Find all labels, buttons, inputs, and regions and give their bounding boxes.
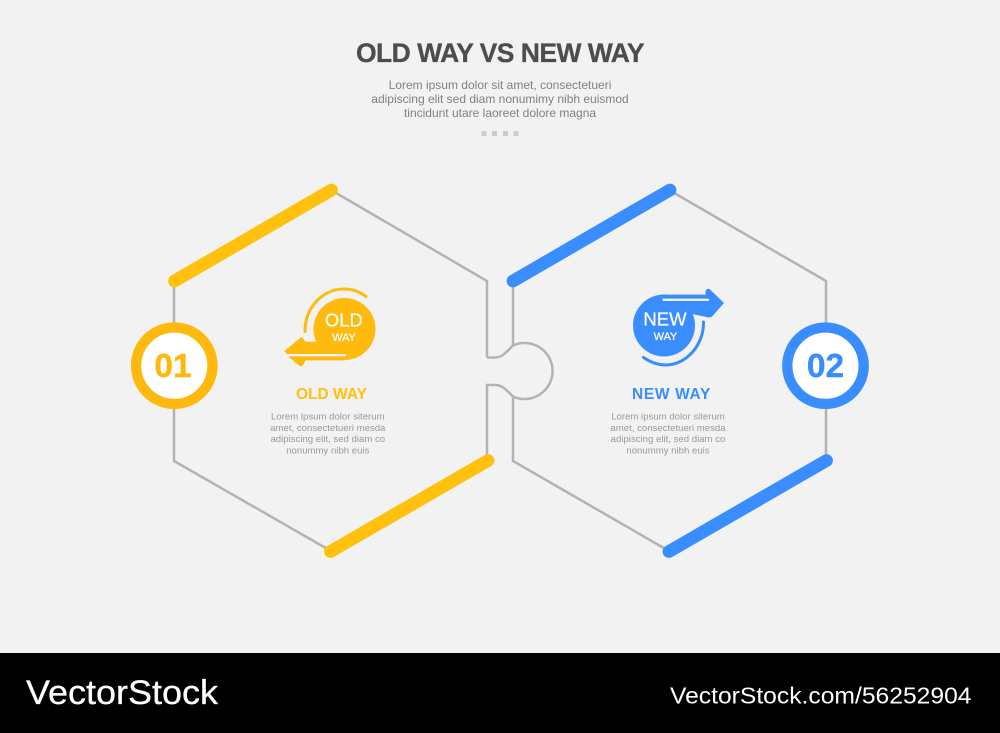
number badge 02: 02 xyxy=(807,348,844,385)
new way heading: NEW WAY xyxy=(632,386,711,403)
watermark footer bar: VectorStock xyxy=(26,674,219,712)
new way top accent bar xyxy=(513,190,670,281)
old way text block xyxy=(270,412,386,456)
panel: new way hexagon outline xyxy=(513,190,826,551)
new way text block: Lorem ipsum dolor siterum xyxy=(611,412,725,422)
new way text block: nonummy nibh euis xyxy=(626,445,710,456)
icon: old way arrow: OLD xyxy=(325,311,363,331)
watermark footer bar xyxy=(0,653,1000,733)
old way heading: OLD WAY xyxy=(296,386,368,403)
old way top accent bar xyxy=(174,190,332,281)
old way text block: Lorem ipsum dolor siterum xyxy=(271,412,385,422)
intro text block: adipiscing elit sed diam nonumimy nibh euismod xyxy=(371,92,629,106)
new way text block xyxy=(610,412,726,456)
old way text block: nonummy nibh euis xyxy=(286,445,370,456)
icon: old way arrow xyxy=(285,289,376,366)
intro text block: tincidunt utare laoreet dolore magna xyxy=(404,106,596,120)
title: OLD WAY VS NEW WAY xyxy=(356,38,645,68)
icon: new way arrow: NEW xyxy=(643,308,687,330)
intro text block: Lorem ipsum dolor sit amet, consectetueri xyxy=(389,78,611,92)
title dots xyxy=(482,131,518,136)
intro text block xyxy=(371,78,629,120)
icon: new way arrow: WAY xyxy=(654,331,677,343)
old way bottom accent bar xyxy=(330,460,488,552)
number badge 02 xyxy=(787,328,864,404)
new way bottom accent bar xyxy=(669,460,826,552)
number badge 01: 01 xyxy=(154,348,192,385)
icon: new way arrow xyxy=(633,289,724,365)
old way text block: amet, consectetueri mesda xyxy=(270,423,386,434)
number badge 01 xyxy=(136,328,212,404)
old way text block: adipiscing elit, sed diam co xyxy=(270,434,385,445)
new way text block: adipiscing elit, sed diam co xyxy=(611,434,725,445)
icon: old way arrow: WAY xyxy=(332,332,356,344)
panel: old way hexagon outline xyxy=(174,190,513,551)
new way text block: amet, consectetueri mesda xyxy=(610,423,726,434)
watermark footer bar: VectorStock.com/56252904 xyxy=(670,682,972,708)
